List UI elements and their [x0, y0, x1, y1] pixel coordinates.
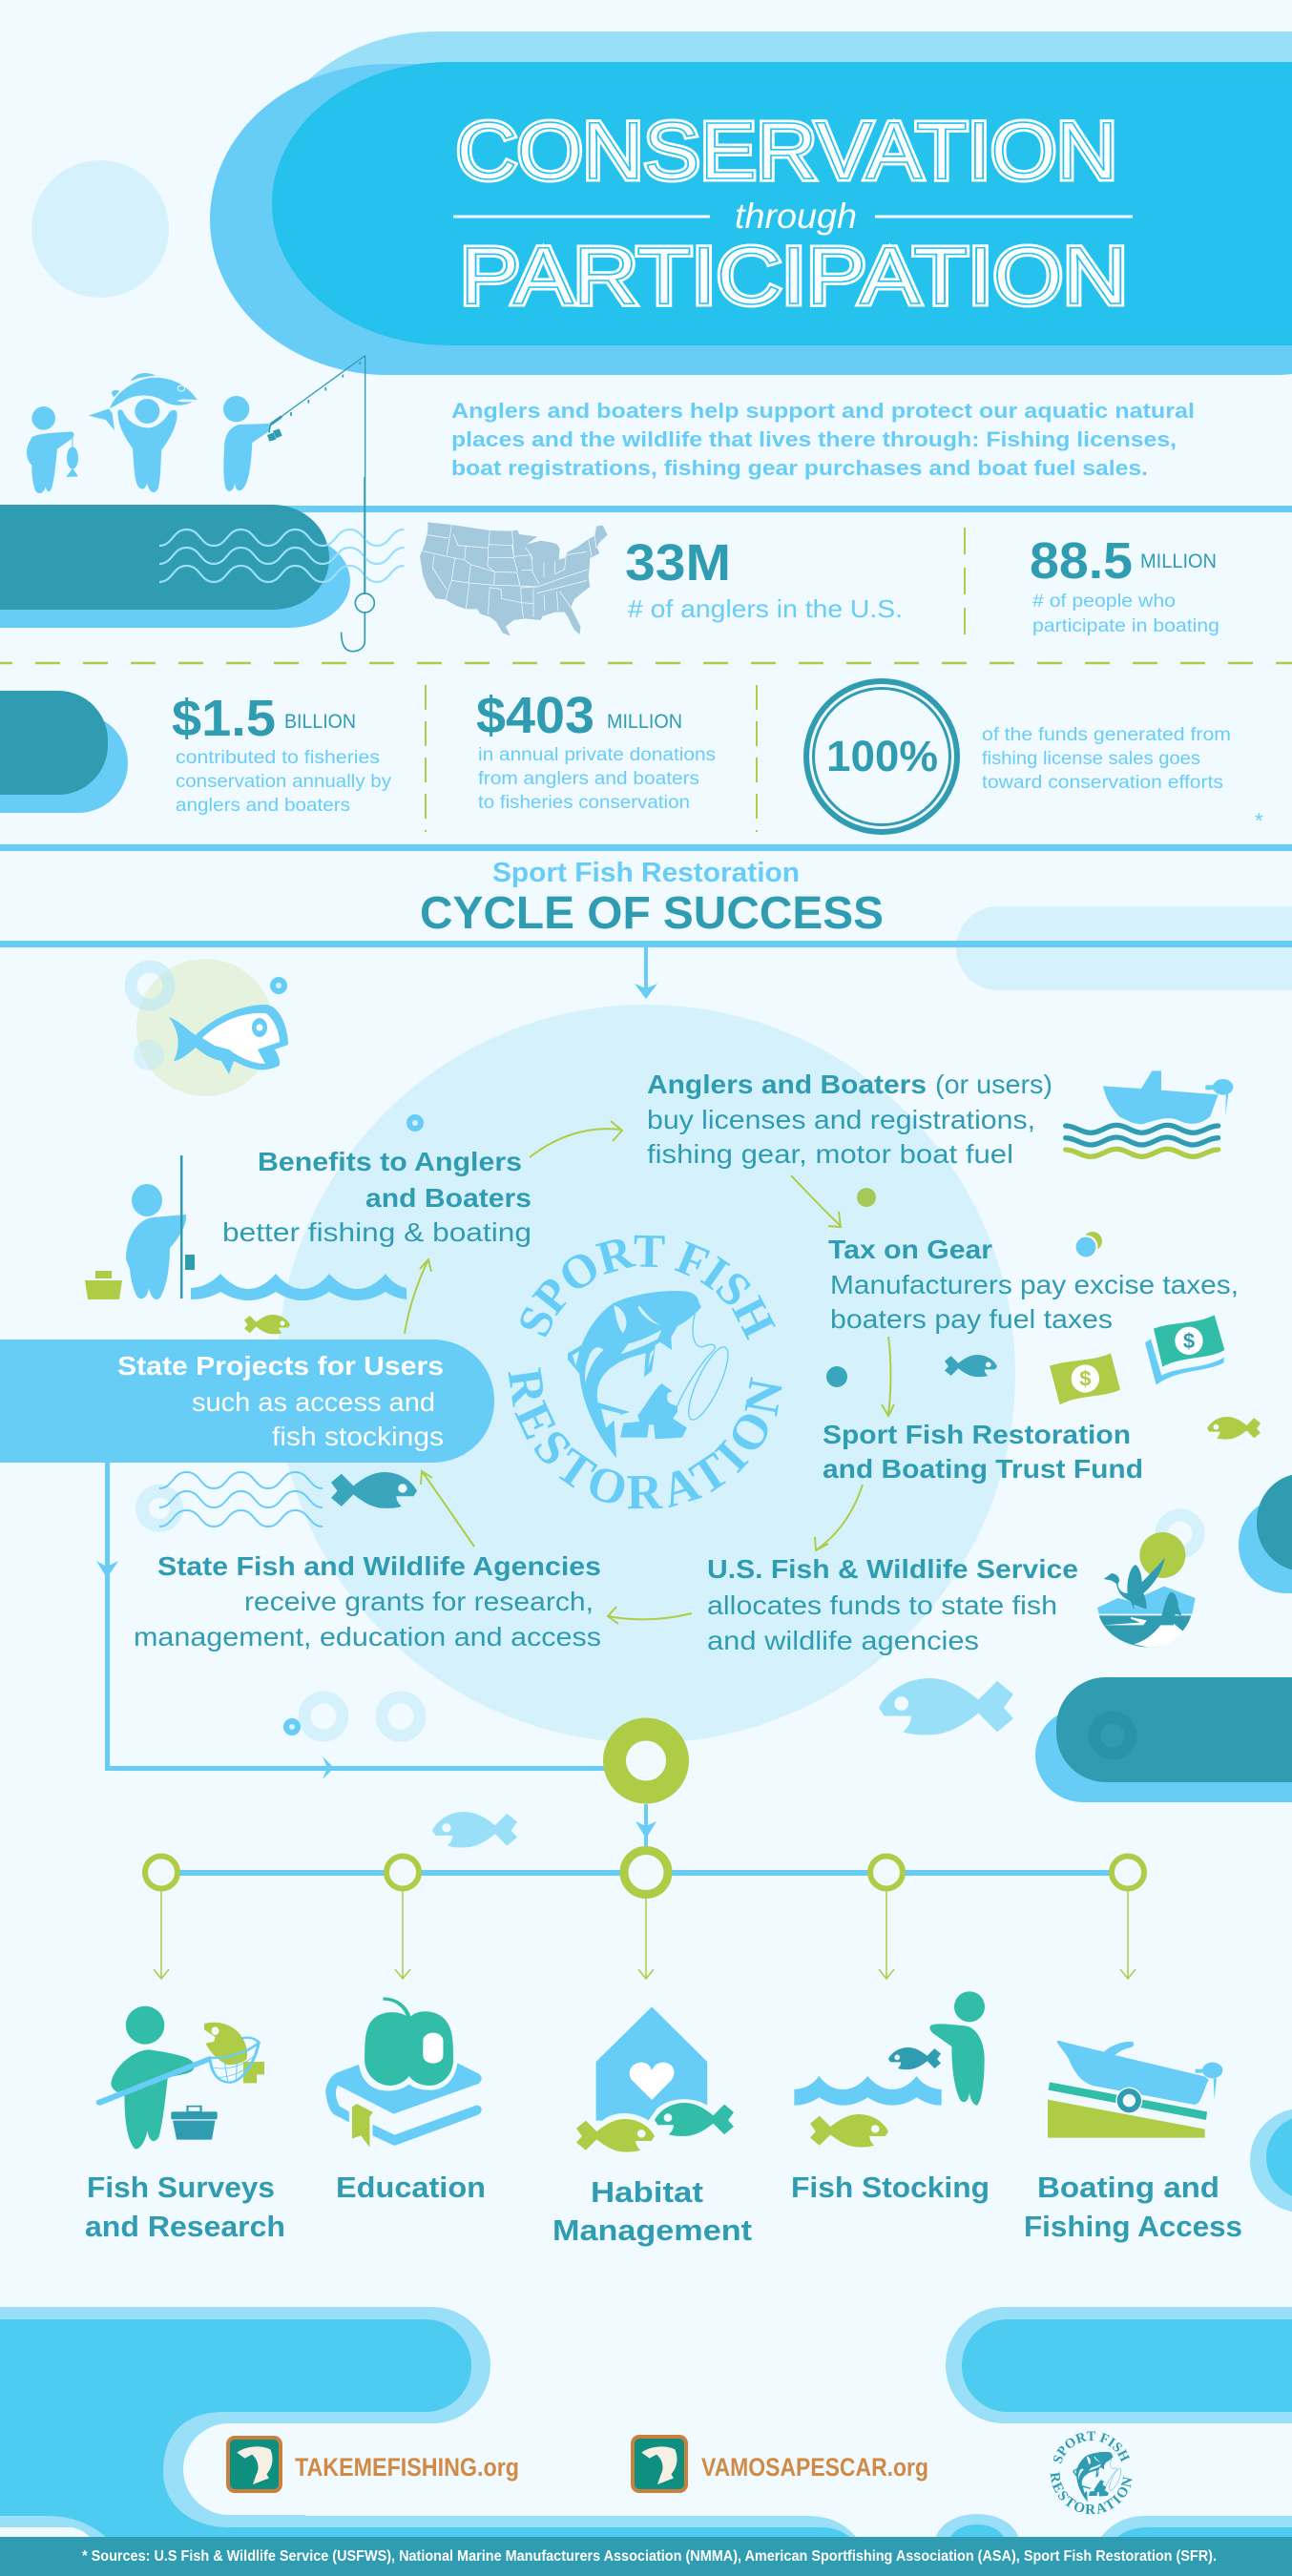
outcome labels: Habitat	[591, 2175, 703, 2209]
header banner	[210, 31, 1292, 375]
stat: 88.5 million boaters: 88.5	[1030, 532, 1133, 590]
waves over pill	[159, 530, 405, 582]
arrow: tax to trust fund	[882, 1337, 894, 1416]
arrow: projects to benefits	[405, 1259, 431, 1334]
step: benefits: better fishing & boating	[222, 1217, 531, 1247]
arrow: benefits to anglers	[530, 1121, 622, 1157]
panel: state projects for users: such as access and	[192, 1387, 435, 1417]
stat: 88.5 million boaters: participate in boating	[1032, 616, 1219, 636]
step: anglers and boaters	[647, 1070, 1052, 1169]
rule below cycle heading	[0, 941, 1292, 947]
left small pill	[0, 691, 128, 813]
step: benefits: Benefits to Anglers	[258, 1147, 522, 1176]
title: CONSERVATION	[456, 106, 1117, 196]
dashed separator	[0, 662, 1292, 664]
title	[453, 106, 1133, 321]
stat: $1.5 billion: conservation annually by	[176, 772, 392, 792]
heading: cycle of success: Sport Fish Restoration	[492, 858, 800, 888]
title: PARTICIPATION	[460, 231, 1128, 321]
decorative bubbles and top fish	[131, 959, 288, 1096]
left teal pill	[0, 505, 350, 628]
bubble dots	[406, 1114, 1102, 1387]
heading: cycle of success	[420, 858, 884, 939]
step: US fish and wildlife service: U.S. Fish & Wildlife Service	[707, 1554, 1078, 1584]
figure holding small fish	[27, 406, 78, 493]
icon: money bills: $	[1183, 1329, 1195, 1353]
icon: big pale fish	[879, 1678, 1013, 1735]
intro paragraph: places and the wildlife that lives there through: Fishing licenses,	[451, 427, 1177, 451]
stat: $403 million: $403	[476, 687, 594, 744]
step: anglers and boaters: buy licenses and registrations,	[647, 1105, 1035, 1134]
central logo: Sport Fish Restoration: RESTORATION	[508, 1367, 782, 1509]
stat: $403 million: in annual private donations	[478, 745, 716, 765]
step: state agencies: receive grants for research,	[244, 1587, 594, 1616]
intro paragraph: Anglers and boaters help support and protect our aquatic natural	[451, 399, 1195, 423]
step: tax on gear: boaters pay fuel taxes	[830, 1304, 1113, 1334]
arrow: service to agencies	[608, 1607, 692, 1624]
step: trust fund: Sport Fish Restoration	[823, 1420, 1131, 1449]
step: state agencies: management, education and access	[134, 1622, 601, 1652]
step: state agencies: State Fish and Wildlife Agencies	[157, 1551, 601, 1581]
logo: sport fish restoration small: RESTORATION	[1050, 2471, 1133, 2514]
intro paragraph	[451, 399, 1195, 480]
step: trust fund	[823, 1420, 1143, 1484]
central logo: Sport Fish Restoration	[508, 1235, 782, 1509]
right edge blob	[1250, 2109, 1292, 2212]
rule under intro	[0, 506, 1292, 512]
icon: education	[325, 1999, 482, 2148]
step: US fish and wildlife service: and wildlife agencies	[707, 1626, 979, 1655]
step: benefits	[222, 1147, 531, 1247]
icon: fish surveys and research	[96, 2006, 264, 2149]
step: benefits: and Boaters	[365, 1183, 531, 1213]
outcome labels: Fishing Access	[1024, 2210, 1242, 2243]
icon: duck and leaping fish emblem	[1097, 1515, 1198, 1648]
step: tax on gear	[828, 1235, 1239, 1334]
icon: fish stocking	[794, 1991, 985, 2148]
logo: takemefishing	[228, 2438, 519, 2491]
arrow: trust fund to service	[815, 1485, 863, 1550]
logo: sport fish restoration small	[1050, 2431, 1133, 2514]
outcome timeline	[145, 1851, 1144, 1979]
outcome labels: Boating and	[1037, 2171, 1219, 2204]
icon: money bills: $	[1079, 1367, 1091, 1391]
step: tax on gear: Manufacturers pay excise taxes,	[830, 1270, 1239, 1299]
connector: projects to hub	[96, 1463, 611, 1779]
outcome labels: and Research	[85, 2210, 285, 2243]
large pale circle	[277, 1005, 1015, 1743]
logo: takemefishing: TAKEMEFISHING.org	[295, 2453, 519, 2482]
stat: 88.5 million boaters: # of people who	[1032, 592, 1176, 612]
funds text	[982, 725, 1263, 833]
arrow: into cycle	[635, 946, 657, 999]
title: CONSERVATION	[456, 106, 1117, 196]
step: anglers and boaters: (or users)	[935, 1070, 1052, 1099]
step: tax on gear: Tax on Gear	[828, 1235, 992, 1264]
funds text: *	[1255, 809, 1263, 833]
arrow: hub to timeline	[636, 1804, 656, 1852]
stat: $403 million: to fisheries conservation	[478, 793, 690, 813]
icon: habitat management	[576, 2006, 734, 2152]
title: through	[735, 197, 857, 236]
stat: $403 million: MILLION	[607, 711, 682, 733]
stat: $1.5 billion: BILLION	[284, 711, 356, 733]
footer sources bar	[0, 2537, 1292, 2576]
figure casting rod	[223, 396, 270, 491]
funds text: fishing license sales goes	[982, 749, 1200, 769]
small blue bubble	[283, 1718, 301, 1735]
stat: $403 million	[476, 687, 716, 813]
panel: state projects for users: fish stockings	[272, 1422, 444, 1451]
icon: US map	[420, 522, 608, 636]
outcome labels: Fish Surveys	[87, 2171, 275, 2204]
step: state agencies	[134, 1551, 601, 1652]
dashed divider	[756, 685, 758, 832]
outcome labels	[85, 2171, 1242, 2247]
fishing rod and hook	[267, 356, 374, 652]
stat: 33M anglers	[625, 534, 903, 623]
stat: 88.5 million boaters: MILLION	[1140, 551, 1217, 572]
stat: $1.5 billion: anglers and boaters	[176, 796, 350, 816]
fishing line over waves	[364, 477, 365, 594]
logo: sport fish restoration small: SPORT FISH	[1053, 2431, 1130, 2463]
icon: green fish right	[1207, 1417, 1261, 1440]
icon: outlined fish	[169, 1005, 288, 1074]
dashed divider	[425, 685, 427, 832]
stat: 88.5 million boaters	[1030, 532, 1219, 636]
panel: state projects for users	[0, 1340, 494, 1463]
icon: money bills	[1050, 1315, 1224, 1404]
outcome labels: Management	[552, 2213, 752, 2247]
stat: 33M anglers: # of anglers in the U.S.	[628, 594, 903, 623]
hub ring	[615, 1729, 677, 1792]
pale rings near hub	[304, 1697, 420, 1735]
outcome labels: Education	[336, 2171, 486, 2204]
title: PARTICIPATION	[460, 231, 1128, 321]
icon: angler with bucket and water	[85, 1155, 406, 1300]
stat: 33M anglers: 33M	[625, 534, 731, 592]
right edge pill lower	[1035, 1677, 1292, 1802]
icon: small green fish	[244, 1315, 290, 1334]
rule above cycle heading	[0, 844, 1292, 851]
stat: $1.5 billion	[172, 690, 392, 816]
step: US fish and wildlife service	[707, 1554, 1078, 1655]
stat: $1.5 billion: contributed to fisheries	[176, 748, 380, 768]
waves and teal fish	[142, 1472, 417, 1527]
icon: people fishing	[27, 356, 374, 652]
pale right pill	[956, 906, 1292, 990]
stat: 100% badge	[806, 681, 957, 832]
footer wave shapes	[0, 2307, 1292, 2571]
stat: 100% badge: 100%	[826, 732, 938, 780]
step: anglers and boaters: fishing gear, motor boat fuel	[647, 1139, 1013, 1169]
arrow: agencies to projects	[421, 1471, 474, 1547]
funds text: toward conservation efforts	[982, 773, 1223, 793]
heading: cycle of success: CYCLE OF SUCCESS	[420, 888, 884, 939]
panel: state projects for users: State Projects for Users	[117, 1351, 444, 1381]
stat: $403 million: from anglers and boaters	[478, 769, 699, 789]
stat: $1.5 billion: $1.5	[172, 690, 276, 747]
logo: vamos a pescar	[633, 2437, 928, 2491]
step: US fish and wildlife service: allocates funds to state fish	[707, 1590, 1057, 1620]
logo: vamos a pescar: VAMOSAPESCAR.org	[701, 2453, 928, 2482]
central logo: Sport Fish Restoration: SPORT FISH	[520, 1235, 776, 1340]
icon: small pale fish	[432, 1812, 517, 1848]
arrow: anglers to tax	[791, 1175, 841, 1227]
intro paragraph: boat registrations, fishing gear purchases and boat fuel sales.	[451, 456, 1148, 480]
dashed divider	[964, 528, 966, 640]
step: anglers and boaters: Anglers and Boaters	[647, 1070, 927, 1099]
step: trust fund: and Boating Trust Fund	[823, 1454, 1143, 1484]
outcome labels: Fish Stocking	[791, 2171, 990, 2204]
right edge pill upper	[1239, 1473, 1292, 1593]
decorative pale circle	[31, 160, 169, 298]
icon: boat on waves	[1066, 1070, 1233, 1156]
icon: small teal fish	[945, 1355, 997, 1377]
funds text: of the funds generated from	[982, 725, 1231, 745]
figure holding big fish	[89, 373, 198, 492]
icon: boating and fishing access	[1048, 2041, 1222, 2138]
